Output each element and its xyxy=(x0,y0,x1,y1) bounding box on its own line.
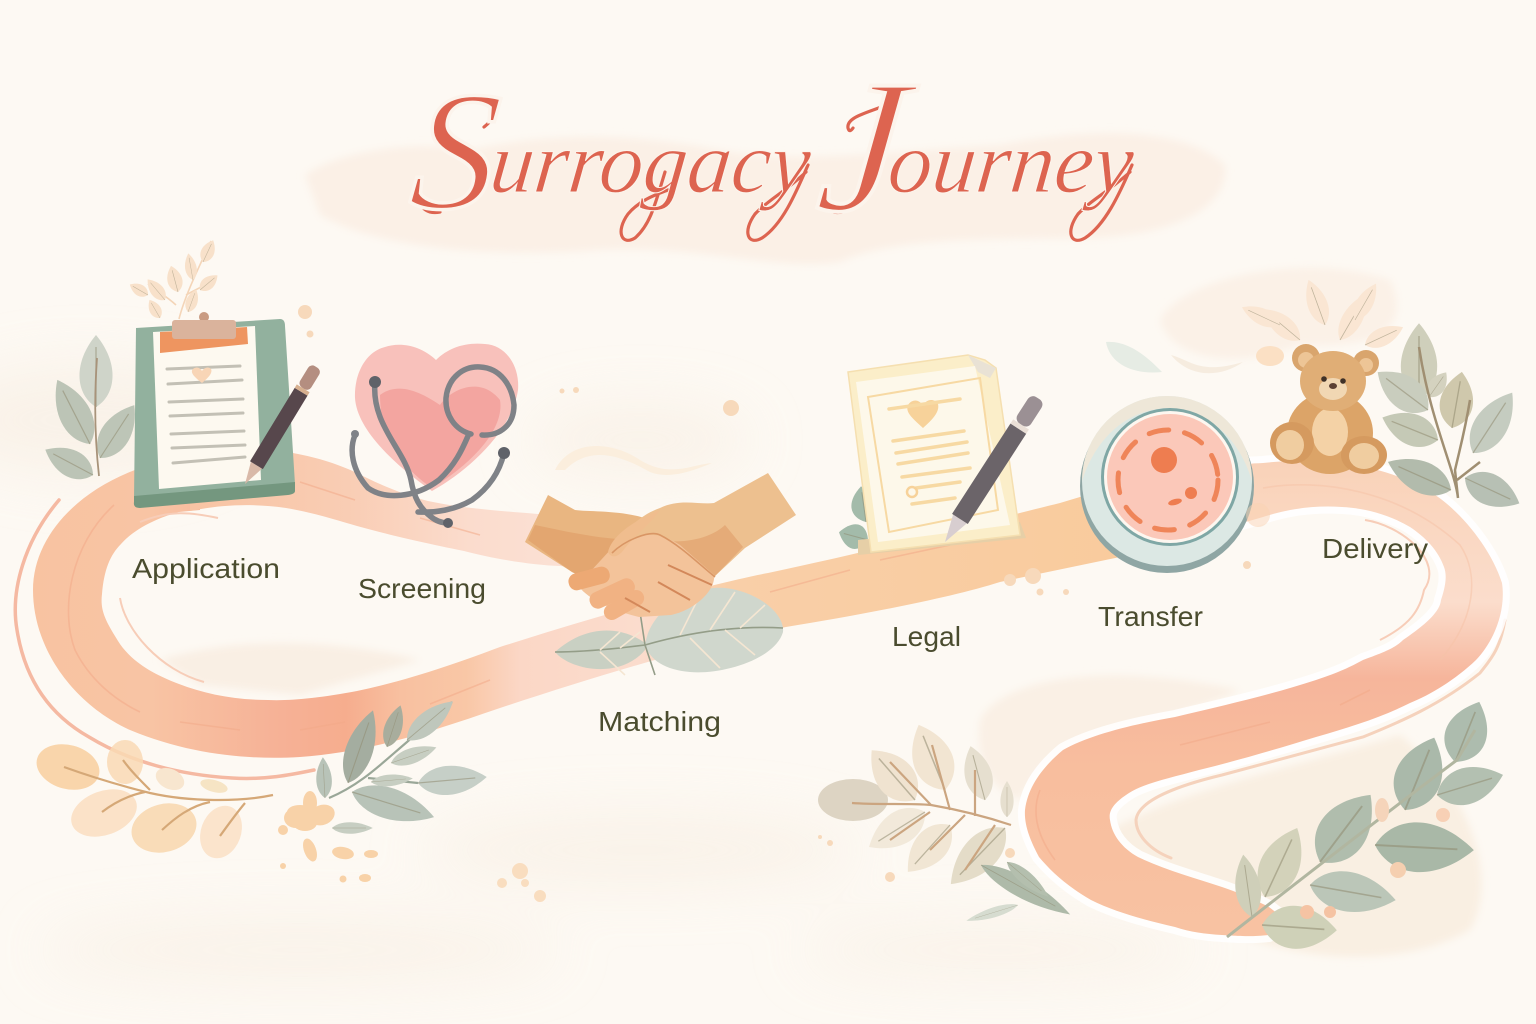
title xyxy=(403,41,1147,252)
step 6 icon: teddy bear xyxy=(1270,344,1387,474)
foliage: right sage branch by teddy xyxy=(1368,323,1526,518)
step 3 icon: handshake over leaves xyxy=(525,446,796,675)
decorative paint dots and swooshes xyxy=(298,305,1450,919)
ribbon: upper band toward handshake xyxy=(190,451,640,575)
foliage: left sage leaves xyxy=(39,335,147,487)
step 5 icon: petri dish xyxy=(1080,396,1254,573)
title: ourney xyxy=(884,114,1139,212)
step 1 icon: clipboard and pen xyxy=(134,312,323,508)
leaves under handshake xyxy=(555,588,783,675)
step 1 label: Application xyxy=(132,553,280,584)
foliage: peach blossom and droplets xyxy=(278,791,546,902)
ribbon: right loop and S-bend xyxy=(1025,461,1503,936)
step 3 label: Matching xyxy=(598,706,721,737)
step 6 label: Delivery xyxy=(1322,533,1428,564)
foliage: lower-left peach branch xyxy=(31,737,273,864)
swirl wash behind handshake xyxy=(555,446,712,475)
foliage: lower-right sage branch xyxy=(1227,694,1508,952)
ribbon: left loop and diagonal xyxy=(33,456,1170,758)
title: S xyxy=(403,56,508,245)
foliage: lower-left sage branch xyxy=(315,693,488,834)
step 4 label: Legal xyxy=(892,621,961,652)
ribbon: inner dashes xyxy=(68,482,1472,860)
title: J xyxy=(810,41,923,252)
step 4 icon: legal document and pen xyxy=(836,355,1046,555)
foliage: small sage sprig xyxy=(965,856,1075,926)
ribbon: outer pale guide lines xyxy=(15,500,1505,858)
step 2 icon: heart and stethoscope xyxy=(351,344,518,528)
title: urrogacy xyxy=(486,114,816,212)
step 5 label: Transfer xyxy=(1098,601,1203,632)
winding ribbon path xyxy=(15,451,1505,936)
foliage: top-left sprig behind clipboard xyxy=(127,237,222,321)
step 2 label: Screening xyxy=(358,573,486,604)
foliage: lower-centre beige branch xyxy=(818,717,1017,896)
ribbon: inner pale lines xyxy=(120,513,1429,682)
foliage: right-top peach sprig xyxy=(1238,277,1407,366)
